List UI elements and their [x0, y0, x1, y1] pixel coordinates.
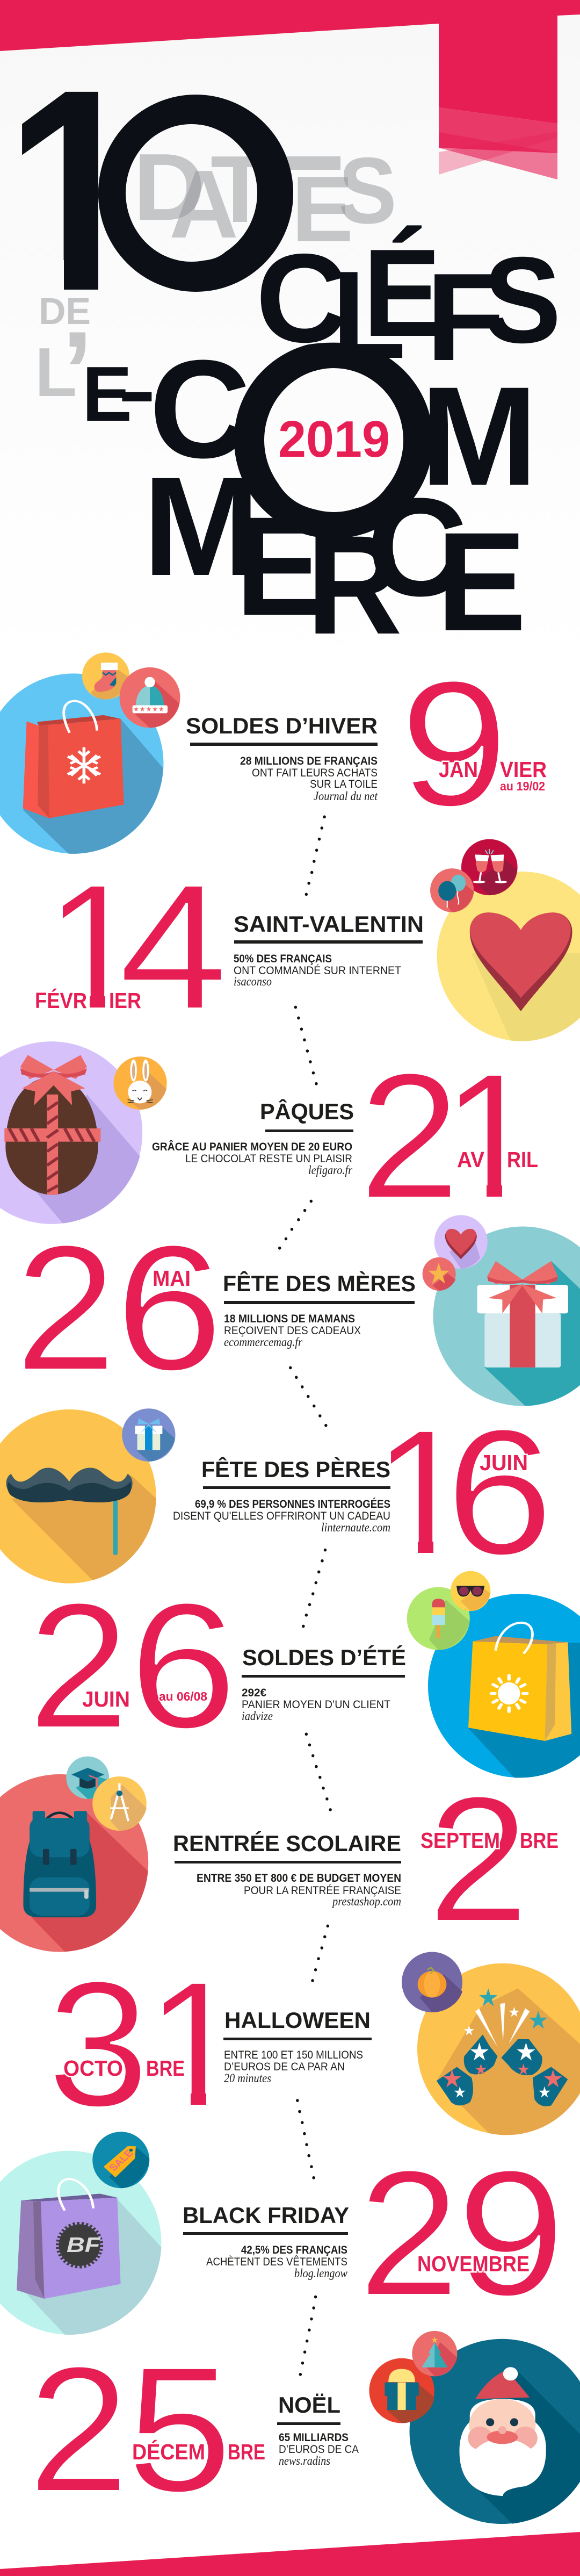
- icon: sale tag: [92, 2132, 149, 2188]
- title: 10 dates clefs de l'e-commerce 2019: M: [143, 448, 260, 605]
- statistic text: isaconso: [234, 975, 272, 988]
- statistic text: [224, 1313, 361, 1349]
- statistic text: linternaute.com: [321, 1521, 390, 1534]
- illustration: fireworks on yellow circle: [417, 1963, 580, 2135]
- heading: BLACK FRIDAY: [183, 2203, 349, 2228]
- panel: soldes d'hiver: [0, 644, 547, 854]
- title: 10 dates clefs de l'e-commerce 2019: S: [338, 139, 397, 243]
- statistic text: 42,5% DES FRANÇAIS: [241, 2244, 347, 2256]
- title: 10 dates clefs de l'e-commerce 2019: O: [220, 294, 447, 592]
- heading: HALLOWEEN: [224, 2007, 371, 2033]
- statistic text: 65 MILLIARDS: [279, 2431, 349, 2444]
- date: 26 mai: MAI: [153, 1266, 191, 1291]
- date: 25 decembre: [28, 2329, 265, 2529]
- statistic text: lefigaro.fr: [308, 1163, 353, 1177]
- statistic text: LE CHOCOLAT RESTE UN PLAISIR: [185, 1153, 352, 1165]
- icon: winter hat: [119, 667, 180, 728]
- date: 9 janvier au 19/02: JAN: [439, 757, 478, 782]
- statistic text: [197, 1872, 401, 1908]
- dotted connector 5: [302, 1549, 327, 1628]
- title: 10 dates clefs de l'e-commerce 2019: 0: [82, 41, 312, 347]
- date: 21 avril: 2: [359, 1036, 460, 1236]
- panel: soldes d'ete: [28, 1566, 580, 1778]
- date: 9 janvier au 19/02: 9: [400, 644, 509, 844]
- date: 29 novembre: 2: [358, 2133, 460, 2333]
- statistic text: POUR LA RENTRÉE FRANÇAISE: [244, 1884, 401, 1897]
- icon: graduation cap: [66, 1757, 109, 1799]
- icon: sunglasses: [451, 1571, 490, 1611]
- title: 10 dates clefs de l'e-commerce 2019: DE: [39, 290, 91, 332]
- statistic text: 20 minutes: [224, 2071, 271, 2085]
- statistic text: ENTRE 350 ET 800 € DE BUDGET MOYEN: [197, 1872, 401, 1884]
- icon: christmas tree: [412, 2331, 457, 2376]
- statistic text: [206, 2244, 348, 2280]
- statistic text: [224, 2049, 363, 2085]
- date: 16 juin: 1: [373, 1392, 472, 1592]
- title: 10 dates clefs de l'e-commerce 2019: A: [169, 150, 238, 258]
- title: 10 dates clefs de l'e-commerce 2019: M: [421, 357, 538, 515]
- date: 14 février: 1: [45, 847, 144, 1047]
- statistic text: news.radins: [279, 2454, 330, 2467]
- date: 26 juin au 06/08: JUIN: [82, 1687, 130, 1711]
- icon: star: [423, 1257, 456, 1291]
- date: 31 octobre: 1: [146, 1944, 245, 2144]
- statistic text: DISENT QU'ELLES OFFRIRONT UN CADEAU: [173, 1510, 390, 1522]
- heading: NOËL: [278, 2392, 340, 2417]
- statistic text: [152, 1140, 353, 1177]
- icon: small present: [369, 2358, 434, 2423]
- date: 9 janvier au 19/02: VIER: [500, 757, 547, 782]
- illustration: purple bag on mint circle: [0, 2151, 161, 2335]
- date: 31 octobre: BRE: [146, 2056, 185, 2081]
- date: 26 juin au 06/08: 2: [28, 1566, 129, 1766]
- date: 9 janvier au 19/02: au 19/02: [500, 779, 545, 793]
- statistic text: Journal du net: [314, 789, 378, 803]
- illustration: backpack on red circle: [0, 1774, 148, 1952]
- statistic text: SUR LA TOILE: [310, 778, 378, 790]
- dotted connector 1: [305, 815, 326, 896]
- statistic text: 18 MILLIONS DE MAMANS: [224, 1313, 355, 1325]
- bottom band: [0, 2532, 580, 2576]
- heading: RENTRÉE SCOLAIRE: [173, 1831, 401, 1856]
- statistic text: 69,9 % DES PERSONNES INTERROGÉES: [195, 1498, 390, 1510]
- dotted connector 9: [299, 2296, 317, 2376]
- top ribbon banner: [0, 0, 580, 179]
- date: 21 avril: 1: [441, 1036, 541, 1236]
- title: 10 dates clefs de l'e-commerce 2019: E: [82, 350, 132, 437]
- illustration: moustache on yellow circle: [0, 1409, 156, 1584]
- date: 25 decembre: BRE: [228, 2440, 265, 2464]
- title: 10 dates clefs de l'e-commerce 2019: R: [307, 506, 402, 664]
- date: 25 decembre: DÉCEM: [132, 2440, 205, 2464]
- statistic text: D’EUROS DE CA: [279, 2443, 359, 2456]
- statistic text: 292€: [242, 1687, 266, 1699]
- title: 10 dates clefs de l'e-commerce 2019: E: [437, 503, 526, 660]
- statistic text: prestashop.com: [331, 1895, 401, 1908]
- date: 29 novembre: NOVEMBRE: [417, 2251, 530, 2276]
- illustration: chocolate egg on purple circle: [0, 1041, 142, 1224]
- title: 10 dates clefs de l'e-commerce 2019: C: [256, 227, 347, 369]
- title: 10 dates clefs de l'e-commerce 2019: 1: [5, 30, 145, 351]
- date: 25 decembre: 2: [28, 2329, 129, 2529]
- illustration: shopping bag on blue circle: [0, 673, 163, 854]
- dotted connector 4: [289, 1366, 328, 1427]
- date: 26 mai: [15, 1208, 223, 1408]
- title: 10 dates clefs de l'e-commerce 2019: C: [367, 470, 468, 625]
- title: 10 dates clefs de l'e-commerce 2019: 2019: [278, 411, 390, 468]
- title: 10 dates clefs de l'e-commerce 2019: F: [426, 248, 505, 387]
- date: 9 janvier au 19/02: [400, 644, 547, 844]
- date: 26 mai: 6: [115, 1208, 223, 1408]
- icon: sale tag: SALE: [107, 2148, 136, 2173]
- date: 26 juin au 06/08: [28, 1566, 237, 1766]
- statistic text: GRÂCE AU PANIER MOYEN DE 20 EURO: [152, 1140, 352, 1153]
- title: 10 dates clefs de l'e-commerce 2019: [22, 91, 556, 634]
- title: 10 dates clefs de l'e-commerce 2019: L: [332, 246, 406, 385]
- statistic text: REÇOIVENT DES CADEAUX: [224, 1325, 361, 1337]
- statistic text: [279, 2431, 359, 2467]
- title: 10 dates clefs de l'e-commerce 2019: É: [363, 224, 441, 363]
- date: 21 avril: AV: [457, 1147, 485, 1172]
- icon: champagne glasses: [461, 839, 518, 895]
- statistic text: [234, 953, 401, 988]
- title: 10 dates clefs de l'e-commerce 2019: E: [292, 156, 353, 261]
- date: 14 février: FÉVR: [35, 988, 87, 1013]
- icon: small heart: [434, 1215, 488, 1269]
- title: 10 dates clefs de l'e-commerce 2019: C: [149, 332, 251, 487]
- illustration: santa on teal circle: [410, 2339, 580, 2524]
- date: 25 decembre: 5: [127, 2329, 233, 2529]
- title: 10 dates clefs de l'e-commerce 2019: -: [118, 347, 156, 434]
- dotted connector 6: [305, 1732, 332, 1811]
- statistic text: PANIER MOYEN D’UN CLIENT: [242, 1699, 390, 1711]
- date: 21 avril: [369, 1074, 538, 1197]
- dotted connector 2: [294, 1006, 318, 1085]
- statistic text: D’EUROS DE CA PAR AN: [224, 2061, 345, 2073]
- date: 16 juin: [389, 1430, 544, 1555]
- date: 31 octobre: [55, 1982, 206, 2106]
- icon: pumpkin: [402, 1952, 462, 2012]
- statistic text: ENTRE 100 ET 150 MILLIONS: [224, 2049, 363, 2061]
- panel: rentree scolaire: [0, 1757, 559, 1959]
- date: 14 février: 4: [119, 847, 228, 1047]
- date: 29 novembre: [358, 2133, 566, 2333]
- statistic text: 50% DES FRANÇAIS: [234, 953, 332, 965]
- date: 14 février: IER: [109, 988, 141, 1013]
- panel: paques: [0, 1036, 541, 1236]
- date: 29 novembre: 9: [456, 2133, 566, 2333]
- title: 10 dates clefs de l'e-commerce 2019: E: [236, 487, 322, 645]
- statistic text: ONT COMMANDÉ SUR INTERNET: [234, 965, 401, 977]
- date: 21 avril: RIL: [507, 1147, 538, 1172]
- icon: rabbit: [113, 1056, 167, 1110]
- illustration: heart on yellow circle: [437, 872, 580, 1041]
- date: 2 septembre: 2: [427, 1759, 529, 1959]
- heading: SOLDES D’ÉTÉ: [242, 1645, 406, 1670]
- panel: black friday: [0, 2132, 566, 2335]
- date: 2 septembre: BRE: [520, 1828, 559, 1853]
- statistic text: [173, 1498, 390, 1534]
- title: 10 dates clefs de l'e-commerce 2019: S: [483, 232, 561, 369]
- dotted connector 3: [278, 1200, 313, 1250]
- date: 16 juin: 6: [445, 1392, 554, 1592]
- date: 2 septembre: SEPTEM: [421, 1828, 500, 1853]
- date: 26 juin au 06/08: 6: [129, 1566, 237, 1766]
- illustration: yellow bag on blue circle: [428, 1594, 580, 1778]
- panel: noel: [28, 2329, 580, 2529]
- heading: PÂQUES: [260, 1098, 354, 1124]
- dotted connector 8: [296, 2099, 315, 2179]
- title: 10 dates clefs de l'e-commerce 2019: D: [133, 134, 205, 240]
- panel: halloween: [47, 1944, 580, 2144]
- statistic text: ONT FAIT LEURS ACHATS: [252, 767, 378, 779]
- date: 14 février: [36, 887, 221, 1008]
- illustration: gift box on teal circle: [433, 1227, 580, 1406]
- date: 26 juin au 06/08: au 06/08: [159, 1689, 207, 1703]
- heading: SOLDES D’HIVER: [186, 713, 378, 738]
- title: 10 dates clefs de l'e-commerce 2019: T: [211, 136, 270, 242]
- title: 10 dates clefs de l'e-commerce 2019: L: [35, 334, 77, 411]
- statistic text: blog.lengow: [294, 2266, 348, 2280]
- statistic text: ecommercemag.fr: [224, 1335, 303, 1349]
- icon: ice lolly: [407, 1587, 470, 1650]
- statistic text: 28 MILLIONS DE FRANÇAIS: [240, 755, 378, 767]
- statistic text: [240, 755, 378, 803]
- illustration: purple bag on mint circle: BF: [67, 2234, 101, 2257]
- panel: fete des meres: [15, 1208, 580, 1408]
- statistic text: ACHÈTENT DES VÊTEMENTS: [206, 2256, 347, 2268]
- statistic text: [242, 1687, 390, 1723]
- icon: compass: [92, 1776, 147, 1831]
- icon: small gift: [122, 1408, 175, 1462]
- title: 10 dates clefs de l'e-commerce 2019: ’: [62, 308, 93, 434]
- date: 31 octobre: OCTO: [63, 2056, 123, 2081]
- dotted connector 7: [311, 1924, 329, 1982]
- icon: balloons: [430, 868, 474, 912]
- heading: SAINT-VALENTIN: [234, 911, 424, 937]
- heading: FÊTE DES PÈRES: [201, 1456, 390, 1482]
- statistic text: iadvize: [242, 1709, 273, 1723]
- date: 26 mai: 2: [15, 1208, 117, 1408]
- panel: fete des peres: [0, 1408, 544, 1584]
- panel: saint-valentin: [35, 839, 580, 1047]
- icon: sock: [82, 652, 129, 700]
- heading: FÊTE DES MÈRES: [223, 1270, 416, 1296]
- date: 31 octobre: 3: [47, 1944, 149, 2144]
- date: 16 juin: JUIN: [480, 1450, 528, 1475]
